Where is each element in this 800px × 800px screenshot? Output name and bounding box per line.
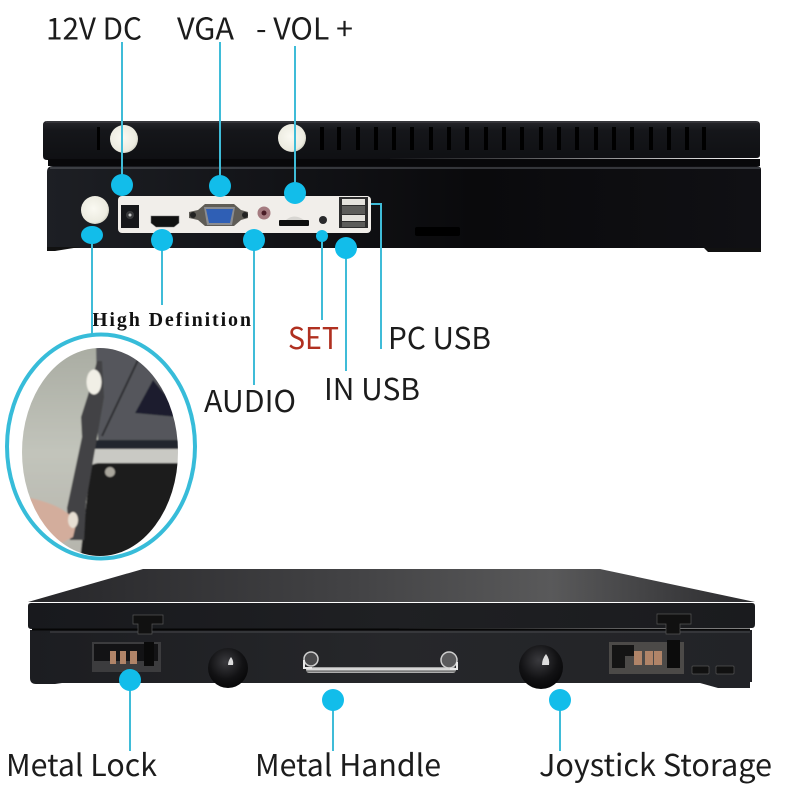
callout: PC USB <box>371 204 491 358</box>
callout: AUDIO <box>204 229 296 421</box>
callout: High Definition <box>92 229 251 331</box>
knob: lid right <box>278 124 306 152</box>
port: USB stack <box>339 197 368 228</box>
callout: IN USB: IN USB <box>324 365 420 409</box>
callout: Joystick Storage: Joystick Storage <box>539 741 772 785</box>
port: SET button <box>319 216 327 224</box>
callout: 12V DC <box>46 4 142 196</box>
callout: volume <box>256 4 353 204</box>
callout: VGA <box>177 4 235 197</box>
callout: Metal Lock: Metal Lock <box>6 741 157 785</box>
callout: VGA: VGA <box>177 4 235 48</box>
port: 12V DC jack <box>121 205 139 228</box>
dot: stand knob <box>81 226 103 244</box>
callout: AUDIO: AUDIO <box>204 377 296 421</box>
rear lid <box>43 121 760 160</box>
device rear view <box>43 121 761 252</box>
connector line to inset <box>91 240 93 335</box>
callout: Metal Handle <box>255 689 441 785</box>
callout: High Definition: High Definition <box>92 309 251 331</box>
inset ring <box>7 334 195 558</box>
port: VGA <box>189 204 248 226</box>
knob: body left <box>81 196 109 224</box>
rear body <box>47 159 761 252</box>
knob: lid left <box>110 125 138 153</box>
front lid <box>28 603 755 629</box>
callout: 12V DC: 12V DC <box>46 4 142 48</box>
callout: volume: - VOL + <box>256 4 353 48</box>
callout: Metal Handle: Metal Handle <box>255 741 441 785</box>
port panel <box>118 196 371 233</box>
callout: PC USB: PC USB <box>388 314 491 358</box>
metal handle <box>304 652 457 673</box>
callout: IN USB <box>324 237 420 409</box>
lock: right <box>609 614 691 674</box>
callout: Metal Lock <box>6 669 157 785</box>
vents: right side <box>692 666 734 674</box>
callout: SET <box>288 230 339 358</box>
port: SD slot <box>279 216 309 226</box>
top surface <box>28 569 755 602</box>
front body <box>30 630 752 688</box>
lock: left <box>92 615 163 672</box>
inset photo <box>18 345 183 560</box>
inset: stand detail photo <box>7 226 195 560</box>
joystick: left <box>208 648 248 688</box>
port: HDMI <box>151 216 179 227</box>
joystick: right <box>519 645 563 689</box>
device front view <box>28 569 755 689</box>
callout: SET: SET <box>288 314 339 358</box>
port: audio <box>258 206 270 220</box>
callout: Joystick Storage <box>539 689 772 785</box>
